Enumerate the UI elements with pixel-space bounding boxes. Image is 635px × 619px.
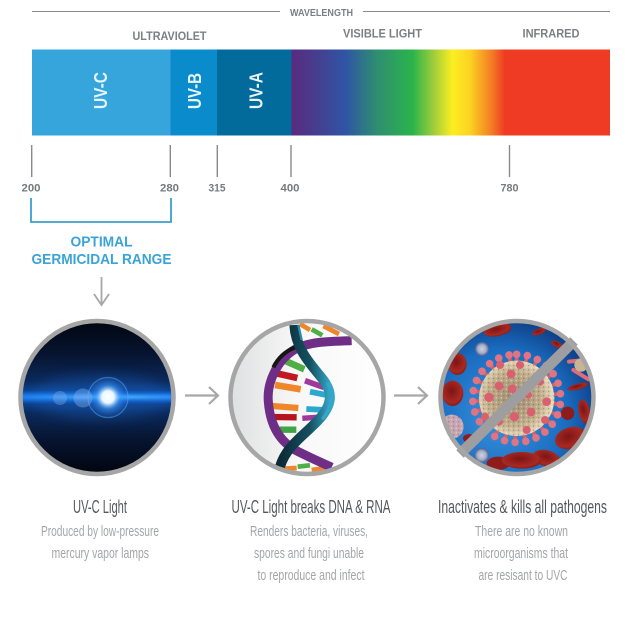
band: UV-A: UV-A: [246, 72, 266, 109]
label: visible light: VISIBLE LIGHT: [343, 26, 423, 40]
wavelength scale: [22, 145, 518, 194]
caption: inactivates pathogens: are resisant to UVC: [478, 567, 568, 584]
heading: optimal germicidal range: OPTIMAL: [70, 234, 132, 250]
caption: breaks DNA and RNA: spores and fungi unable: [254, 545, 364, 562]
arrow: down to UV-C light: [94, 277, 109, 305]
caption: breaks DNA and RNA: UV-C Light breaks DNA & RNA: [232, 497, 390, 517]
heading: optimal germicidal range: GERMICIDAL RANGE: [32, 251, 172, 268]
caption: inactivates pathogens: [438, 497, 607, 584]
icon: UV-C light circle: [18, 318, 176, 476]
caption: UV-C light: Produced by low-pressure: [41, 523, 159, 540]
caption: UV-C light: UV-C Light: [73, 497, 127, 517]
label: infrared: INFRARED: [522, 26, 580, 40]
band: visible and infrared gradient: [292, 50, 610, 136]
arrow: light to DNA: [185, 387, 218, 404]
wavelength scale: 780: [500, 182, 518, 194]
band: UV-B: [170, 50, 217, 136]
band: UV-C: UV-C: [91, 72, 111, 109]
caption: inactivates pathogens: There are no known: [475, 523, 568, 540]
band: UV-C: [32, 50, 170, 136]
heading: optimal germicidal range: [32, 234, 172, 268]
caption: breaks DNA and RNA: to reproduce and infect: [258, 567, 365, 584]
wavelength scale: 400: [280, 182, 300, 194]
icon: pathogen circle: [438, 318, 596, 476]
caption: inactivates pathogens: microorganisms that: [474, 545, 569, 562]
band: UV-A: [217, 50, 292, 136]
spectrum bar: [32, 50, 610, 136]
wavelength scale: 200: [22, 182, 40, 194]
icon: DNA circle: [228, 318, 386, 476]
wavelength scale: 315: [208, 182, 226, 194]
bracket: optimal range: [31, 198, 171, 222]
caption: breaks DNA and RNA: Renders bacteria, viruses,: [250, 523, 368, 540]
wavelength scale: 280: [160, 182, 179, 194]
caption: UV-C light: [41, 497, 159, 562]
arrow: DNA to pathogens: [394, 387, 427, 404]
band: UV-B: UV-B: [185, 73, 205, 109]
wavelength heading: WAVELENGTH: [290, 8, 353, 19]
caption: UV-C light: mercury vapor lamps: [52, 545, 149, 562]
caption: breaks DNA and RNA: [232, 497, 390, 584]
label: ultraviolet: ULTRAVIOLET: [132, 29, 207, 43]
